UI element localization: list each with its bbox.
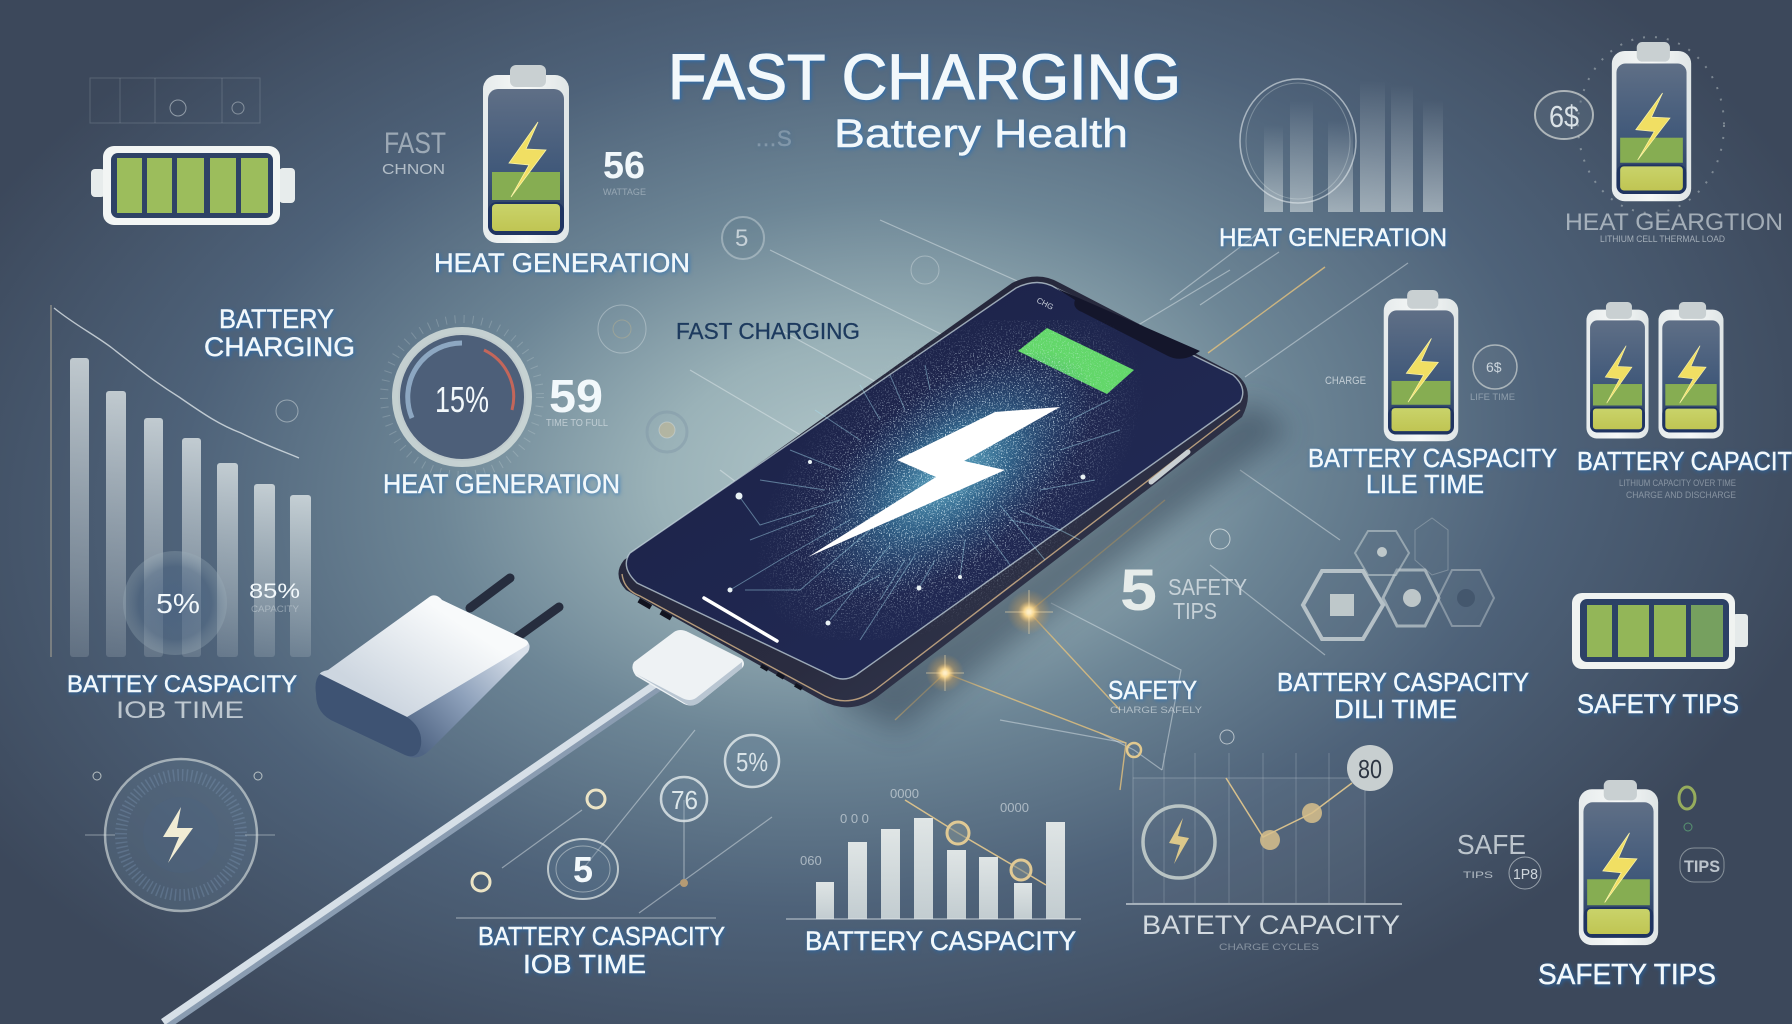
gauge arc blue <box>408 343 462 418</box>
text block: battery charging <box>204 304 355 362</box>
bars <box>816 818 1065 919</box>
paired batteries, right <box>1577 302 1792 500</box>
stat note: TIME TO FULL <box>546 418 608 429</box>
axis <box>50 305 52 657</box>
connector lines <box>502 220 1408 913</box>
safety tips block <box>1108 529 1247 715</box>
lightning bolt <box>808 407 1060 557</box>
battery bar green <box>1018 328 1134 394</box>
cells <box>1587 605 1723 657</box>
label: BATTERY CASPACITY <box>478 921 725 951</box>
icon: battery right <box>1658 302 1724 438</box>
gold rings <box>947 822 1031 880</box>
icon: battery left <box>1586 302 1649 438</box>
hexagon large <box>1303 571 1383 639</box>
tips pill <box>1680 848 1724 882</box>
gauge arc red <box>484 350 514 410</box>
disc <box>123 551 227 655</box>
battery case <box>103 146 280 225</box>
icon: horizontal battery right <box>1572 593 1748 669</box>
safety: SAFETY <box>1168 574 1247 600</box>
chart: centre bars <box>786 786 1081 956</box>
icon: horizontal battery top-left <box>90 78 295 225</box>
charger <box>316 578 559 758</box>
tips: TIPS <box>1173 598 1217 624</box>
heading: HEAT GENERATION <box>1219 224 1447 252</box>
small values: 0000 <box>890 786 919 801</box>
coin 5 <box>548 839 618 899</box>
label: SAFETY TIPS <box>1538 959 1716 991</box>
small values: 0000 <box>1000 800 1029 815</box>
note: LITHIUM CELL THERMAL LOAD <box>1600 234 1725 244</box>
badge 80 <box>1347 745 1393 791</box>
small note: WATTAGE <box>603 187 646 197</box>
chart: left decline bars <box>51 305 311 657</box>
stat: 59: 59 <box>549 370 603 422</box>
charger top panel <box>320 595 528 717</box>
fading bars <box>1264 80 1443 212</box>
hexagon right <box>1438 570 1494 626</box>
bolt circle <box>1143 806 1215 878</box>
text block: battery charging: CHARGING <box>204 332 355 362</box>
hexagon small <box>1415 518 1448 575</box>
icon: vertical battery <box>1578 780 1658 946</box>
label: battery capacity left: BATTEY CASPACITY <box>67 671 297 698</box>
label time: LILE TIME <box>1366 469 1484 499</box>
label safe: SAFE <box>1457 829 1526 860</box>
note: CHARGE SAFELY <box>1110 705 1202 715</box>
grid <box>1133 753 1365 903</box>
icon: vertical battery <box>483 65 569 243</box>
battery bottom right group: TIPS <box>1684 857 1720 876</box>
phone shadow <box>830 400 1290 730</box>
small values: 060 <box>800 853 822 868</box>
hexagon icons <box>1330 547 1475 616</box>
chart: right line chart <box>1126 730 1402 952</box>
label: battery capacity left: IOB TIME <box>116 697 244 724</box>
timeline bubbles: IOB TIME <box>523 949 646 979</box>
gold sparks <box>926 590 1053 692</box>
icon: vertical battery <box>1384 290 1458 442</box>
battery cells <box>117 158 268 213</box>
text block: battery charging: BATTERY <box>219 304 334 334</box>
gauge: heat <box>383 319 620 499</box>
bars <box>70 358 311 657</box>
home bar <box>704 598 777 641</box>
small note: TIPS <box>1463 870 1493 880</box>
timeline bubbles: 5 <box>573 849 593 890</box>
label: BATETY CAPACITY <box>1142 910 1400 940</box>
ring top left <box>1127 743 1141 757</box>
title line 1: FAST CHARGING <box>668 41 1181 113</box>
stat: 5 bubble top: 5 <box>735 225 748 252</box>
faint data sketch <box>90 78 260 123</box>
dotted orbit <box>1578 37 1724 213</box>
circuit rays <box>730 365 1120 640</box>
battery bottom right group <box>1457 780 1724 991</box>
badge <box>1473 345 1517 389</box>
sparkle particles <box>760 320 1139 640</box>
paired batteries, right: CHARGE AND DISCHARGE <box>1626 490 1736 500</box>
battery top right group <box>1535 37 1783 244</box>
timeline bubbles: 5% <box>736 747 768 777</box>
trend line <box>905 800 1046 885</box>
label: battery capacity life time lower right: BATTERY CASPACITY <box>1277 667 1529 697</box>
connector <box>632 630 744 706</box>
label: battery capacity life time lower right: DILI TIME <box>1334 694 1457 724</box>
stat: 56: 56 <box>603 145 645 187</box>
ring <box>1240 79 1356 203</box>
cable <box>163 630 744 1024</box>
badge 80: 80 <box>1358 754 1382 784</box>
title line 2: Battery Health <box>834 112 1128 156</box>
badge <box>1535 91 1593 139</box>
label: fast: FAST <box>384 127 446 160</box>
label: BATTERY CASPACITY <box>805 926 1076 956</box>
bolt <box>1169 818 1189 864</box>
small values <box>800 786 1029 868</box>
notch <box>1056 288 1200 359</box>
phone body <box>618 276 1248 707</box>
title <box>668 41 1181 156</box>
gold circuit lines <box>895 267 1325 790</box>
battery icon with labels, top left centre <box>382 65 690 278</box>
small round icons left of phone <box>598 217 939 452</box>
battery top right group: 6$ <box>1549 99 1579 134</box>
stat: 5%: 5% <box>156 588 200 619</box>
small icon <box>1210 529 1230 549</box>
charge glow <box>764 303 1136 647</box>
label: chinon: CHNON <box>382 161 445 178</box>
ray end dots <box>728 460 1086 626</box>
trend curve <box>54 308 299 458</box>
rings <box>472 790 605 891</box>
bubble 76 <box>661 777 707 821</box>
phone screen <box>626 282 1243 679</box>
note: CHARGE CYCLES <box>1219 942 1319 952</box>
small icon <box>1220 730 1234 744</box>
heading: heat generation: HEAT GENERATION <box>383 469 620 499</box>
title faint prefix: …S <box>755 126 792 151</box>
icons: hexagons <box>1303 518 1494 639</box>
gauge rays <box>384 319 540 475</box>
charger end face <box>316 674 421 756</box>
stat: 85%: 85% <box>249 580 300 603</box>
hexagon top <box>1355 531 1409 575</box>
notes: LITHIUM CAPACITY OVER TIME <box>1619 478 1736 488</box>
timeline bubbles <box>456 735 779 979</box>
gauge disc <box>398 333 526 461</box>
top-right fading chart <box>1219 79 1447 252</box>
bolt <box>163 807 193 863</box>
number 5: 5 <box>1120 558 1157 623</box>
side button <box>1151 452 1188 482</box>
timeline bubbles: 76 <box>671 785 698 815</box>
battery capacity battery, centre right: LIFE TIME <box>1470 392 1515 402</box>
battery capacity battery, centre right: 6$ <box>1486 359 1502 375</box>
bubble 5% <box>725 735 779 787</box>
gold trend <box>1226 778 1352 837</box>
gold rings <box>1260 803 1322 850</box>
label: battery capacity left <box>67 671 297 724</box>
gauge value: 15% <box>435 379 489 420</box>
badge <box>1509 857 1541 889</box>
safety label: SAFETY <box>1108 675 1197 705</box>
small icon <box>276 400 298 422</box>
small values: 0 0 0 <box>840 811 869 826</box>
baseline <box>456 917 716 919</box>
label: safety tips right: SAFETY TIPS <box>1577 689 1739 719</box>
label: HEAT GEARGTION <box>1565 209 1783 236</box>
phone rim highlight <box>622 410 1240 701</box>
battery capacity battery, centre right <box>1308 290 1557 499</box>
prongs <box>470 578 559 638</box>
green ring <box>1679 787 1695 809</box>
gauge ring <box>396 331 528 463</box>
phone ports <box>638 598 803 690</box>
hexagon medium <box>1383 570 1439 626</box>
note: CAPACITY <box>251 604 299 614</box>
charger body <box>316 595 530 758</box>
status text: CHG <box>1035 296 1055 312</box>
baseline <box>1126 903 1402 905</box>
battery terminals <box>91 168 295 203</box>
label: BATTERY CASPACITY <box>1308 443 1557 473</box>
icon: vertical battery <box>1612 42 1692 202</box>
small notes: CHARGE <box>1325 375 1366 387</box>
battery bottom right group: 1P8 <box>1513 866 1538 883</box>
heading: heat generation: HEAT GENERATION <box>434 248 690 278</box>
baseline <box>786 918 1081 920</box>
label: fast charging centre: FAST CHARGING <box>676 318 860 344</box>
icon: bolt dial bottom left <box>85 759 275 911</box>
label: battery capacity life time lower right <box>1277 667 1529 724</box>
phone <box>618 276 1290 730</box>
side rings <box>93 772 262 780</box>
